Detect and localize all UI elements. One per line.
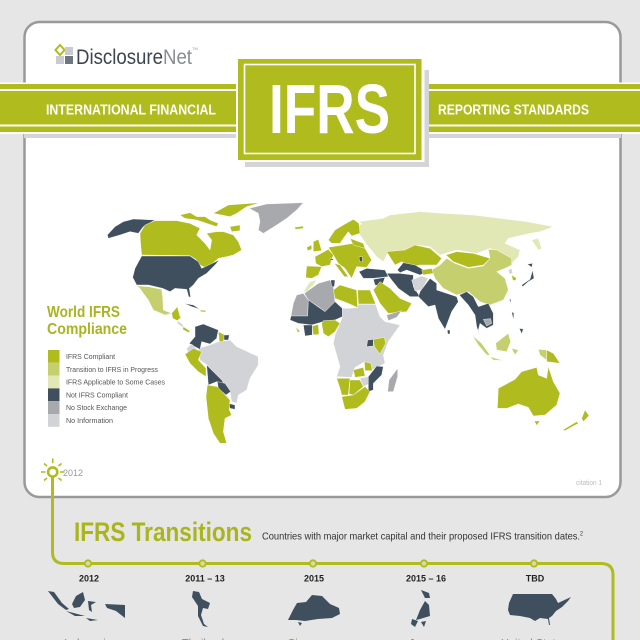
icon: Singapore <box>288 595 340 626</box>
banner ribbon <box>0 82 640 134</box>
legend <box>48 350 165 427</box>
timeline line <box>52 476 613 640</box>
subtitle: Countries with major market capital and their proposed IFRS transition dates. <box>262 530 620 542</box>
legend: IFRS Applicable to Some Cases <box>66 378 165 387</box>
timeline start: sun icon <box>41 458 64 480</box>
legend: No Information <box>66 416 113 425</box>
banner shadow <box>24 134 621 138</box>
banner text: left: INTERNATIONAL FINANCIAL <box>46 102 216 118</box>
legend: No Stock Exchange <box>66 403 127 412</box>
map: South America <box>185 324 258 443</box>
heading: World IFRS Compliance <box>47 304 127 338</box>
map: Oceania <box>473 333 589 431</box>
legend: IFRS Compliant <box>66 352 115 361</box>
timeline start label: 2012 <box>63 468 83 479</box>
logo: DisclosureNet: TM <box>192 46 198 51</box>
logo: DisclosureNet: DisclosureNet <box>76 46 192 69</box>
title box: IFRS <box>236 57 429 167</box>
title box: IFRS: IFRS <box>269 70 390 148</box>
citation: citation 1 <box>576 478 602 487</box>
legend: Transition to IFRS in Progress <box>66 365 158 374</box>
icon: United States <box>508 594 571 625</box>
legend: Not IFRS Compliant <box>66 390 128 399</box>
timeline dates <box>79 574 545 584</box>
map: North and Central America <box>107 203 303 333</box>
timeline dates: 2015 <box>304 574 324 584</box>
timeline nodes <box>85 560 537 567</box>
banner text: right: REPORTING STANDARDS <box>438 102 589 118</box>
world map <box>107 203 589 443</box>
country labels <box>64 638 568 640</box>
subtitle: 2 <box>580 532 584 538</box>
icon: Japan <box>411 590 430 627</box>
heading: IFRS Transitions: IFRS Transitions <box>74 517 252 547</box>
map: Europe <box>294 219 388 278</box>
panel: white map card <box>24 22 620 497</box>
timeline dates: TBD <box>526 574 545 584</box>
timeline dates: 2012 <box>79 574 99 584</box>
heading: World IFRS Compliance: Compliance <box>47 321 127 338</box>
icon: Indonesia <box>48 591 125 621</box>
heading: World IFRS Compliance: World IFRS <box>47 304 120 321</box>
map: Asia <box>357 212 553 337</box>
timeline dates: 2015 – 16 <box>406 574 446 584</box>
timeline dates: 2011 – 13 <box>185 574 225 584</box>
map: Africa <box>290 280 400 409</box>
icon: Thailand <box>192 591 210 627</box>
